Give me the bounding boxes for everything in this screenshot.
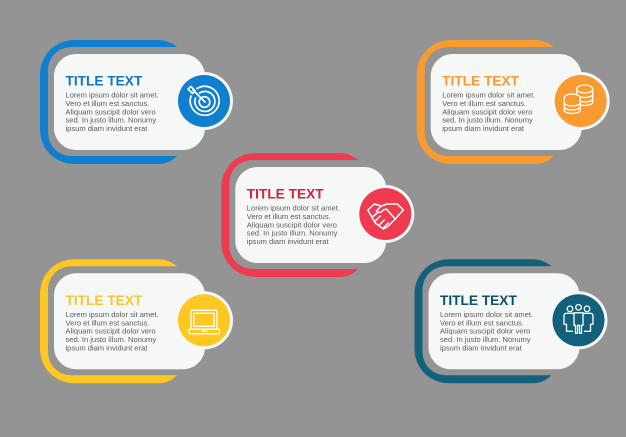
body text: ipsum diam invidunt erat [442,124,525,133]
card background [54,273,205,369]
body text: Lorem ipsum dolor sit amet. [66,310,159,319]
card background [54,54,205,150]
body text: sed. In justo illum. Nonumy [440,335,531,344]
body text [442,91,535,133]
icon: laptop [189,310,220,334]
body text [247,204,340,246]
icon badge [555,75,607,127]
title: TITLE TEXT [442,74,520,89]
title: TITLE TEXT [66,293,143,308]
body text: sed. In justo illum. Nonumy [66,335,156,344]
body text: Lorem ipsum dolor sit amet. [66,91,159,100]
icon: target [188,86,219,115]
body text: Lorem ipsum dolor sit amet. [247,204,340,213]
body text: sed. In justo illum. Nonumy [66,116,156,125]
panel: laptop card [40,259,233,383]
circle ring [175,72,233,130]
body text [440,310,533,352]
icon: team of three people [564,304,593,333]
body text: sed. In justo illum. Nonumy [442,116,533,125]
teal bracket [414,259,552,383]
body text [66,91,159,133]
yellow bracket [40,259,177,383]
panel: team card [414,259,608,383]
circle ring [175,291,233,349]
title: TITLE TEXT [66,74,143,89]
body text: Lorem ipsum dolor sit amet. [440,310,533,319]
circle ring [550,291,608,349]
body text: Aliquam suscipit dolor vero [66,327,156,336]
icon badge [178,75,230,127]
card background [235,167,386,263]
red bracket [221,153,358,277]
body text: sed. In justo illum. Nonumy [247,229,338,238]
card background [431,54,582,150]
icon: coins [564,85,593,114]
circle ring [552,72,610,130]
icon badge [359,188,411,240]
body text: ipsum diam invidunt erat [66,343,148,352]
body text [66,310,159,352]
orange bracket [417,40,554,164]
body text: Vero et illum est sanctus. [440,318,524,327]
body text: Vero et illum est sanctus. [66,99,149,108]
body text: Aliquam suscipit dolor vero [66,107,156,116]
icon badge [552,294,604,346]
body text: ipsum diam invidunt erat [66,124,148,133]
body text: Aliquam suscipit dolor vero [442,107,532,116]
body text: Vero et illum est sanctus. [247,212,331,221]
body text: ipsum diam invidunt erat [247,237,329,246]
body text: ipsum diam invidunt erat [440,343,523,352]
body text: Aliquam suscipit dolor vero [440,327,530,336]
icon: handshake [368,204,403,229]
circle ring [356,185,414,243]
icon badge [178,294,230,346]
panel: coins card [417,40,610,164]
panel: handshake card [221,153,414,277]
card background [428,273,580,369]
body text: Lorem ipsum dolor sit amet. [442,91,535,100]
body text: Vero et illum est sanctus. [66,318,149,327]
title: TITLE TEXT [440,293,517,308]
body text: Aliquam suscipit dolor vero [247,220,337,229]
blue bracket [40,40,177,164]
panel: target card [40,40,233,164]
body text: Vero et illum est sanctus. [442,99,526,108]
title: TITLE TEXT [247,187,324,202]
